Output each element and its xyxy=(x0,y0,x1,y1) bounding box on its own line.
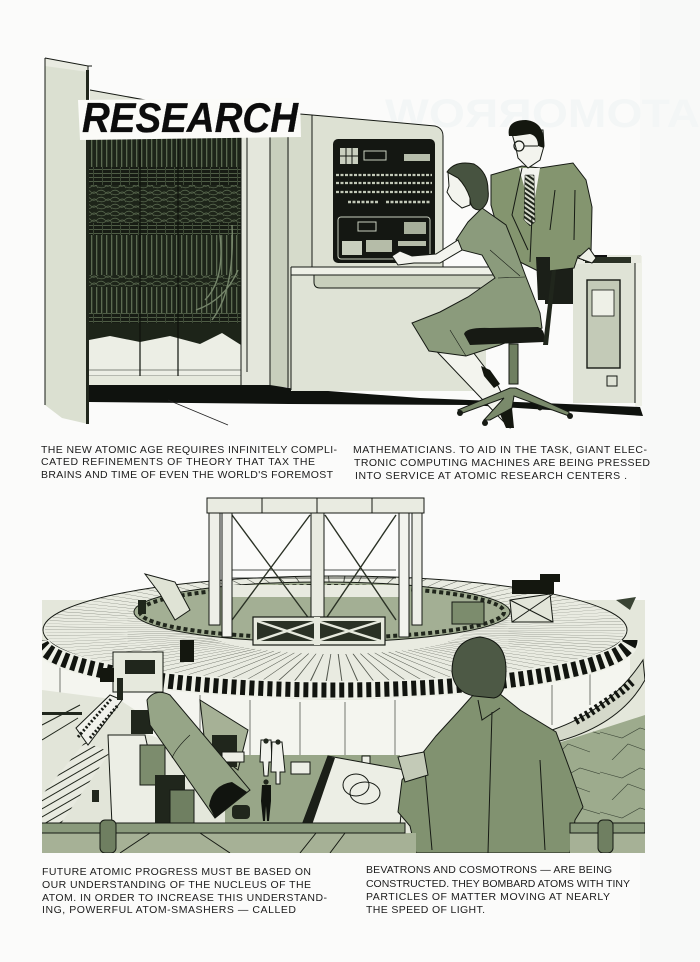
caption: computing machines: TRONIC COMPUTING MACHINES ARE BEING PRESSED xyxy=(354,457,650,469)
left platform xyxy=(42,652,165,825)
tilted table in foreground xyxy=(302,756,405,825)
equipment around tube xyxy=(131,700,248,825)
accelerator tube xyxy=(147,692,250,819)
caption: atom smashers: PARTICLES OF MATTER MOVING AT NEARLY xyxy=(366,891,610,903)
open cabinet with wiring xyxy=(89,137,267,386)
caption: computing machines: THE NEW ATOMIC AGE REQUIRES INFINITELY COMPLI- xyxy=(41,444,338,456)
outer ring surface xyxy=(43,576,627,684)
woman's arm xyxy=(392,240,462,265)
outer stepped ramp at right xyxy=(552,660,645,742)
woman's shoes xyxy=(481,366,514,428)
man in suit xyxy=(491,120,596,304)
ramp steps xyxy=(574,682,632,722)
title label: RESEARCH: RESEARCH xyxy=(82,94,300,141)
caption: computing machines xyxy=(41,444,650,482)
left wall xyxy=(45,58,240,424)
caption: atom smashers: ING, POWERFUL ATOM-SMASHERS — CALLED xyxy=(42,904,296,916)
control block xyxy=(113,652,163,692)
caption: atom smashers: CONSTRUCTED. THEY BOMBARD ATOMS WITH TINY xyxy=(366,878,630,890)
clipboard xyxy=(398,752,428,782)
console cabinet xyxy=(289,114,496,391)
magnet slots dark row xyxy=(42,640,638,698)
faint show-through from the reverse page xyxy=(385,0,700,962)
head of man xyxy=(452,637,506,698)
caption: atom smashers: FUTURE ATOMIC PROGRESS MUST BE BASED ON xyxy=(42,866,311,878)
floor marks xyxy=(168,400,228,425)
stairs xyxy=(76,695,122,745)
caption: computing machines: CATED REFINEMENTS OF THEORY THAT TAX THE xyxy=(41,456,315,468)
wall seams xyxy=(60,668,590,755)
floor shadow band xyxy=(89,385,643,416)
standing worker on platform xyxy=(117,678,123,700)
woman at console xyxy=(392,163,573,428)
tower frame xyxy=(207,498,424,638)
back floor xyxy=(42,600,645,853)
caption: computing machines: MATHEMATICIANS. TO AID IN THE TASK, GIANT ELEC- xyxy=(353,444,648,456)
stool and base xyxy=(457,270,573,426)
control panel xyxy=(333,139,435,263)
illustration: atom smasher xyxy=(40,498,645,853)
man's head xyxy=(509,120,544,168)
faint show-through from the reverse page: ATOMORROW xyxy=(385,92,700,136)
woman's legs xyxy=(423,337,512,428)
caption: atom smashers: ATOM. IN ORDER TO INCREASE THIS UNDERSTAND- xyxy=(42,892,328,904)
caption: computing machines: BRAINS AND TIME OF EVEN THE WORLD'S FOREMOST xyxy=(41,469,334,481)
man in green coat xyxy=(398,637,583,853)
illustration: computer room xyxy=(45,58,643,428)
woman's head xyxy=(447,163,488,210)
cabinet pillar xyxy=(241,116,289,390)
woman's stool back xyxy=(536,257,550,300)
floor right xyxy=(560,715,645,822)
magnet slots front band xyxy=(42,640,639,699)
caption: atom smashers: OUR UNDERSTANDING OF THE NUCLEUS OF THE xyxy=(42,879,311,891)
side unit xyxy=(560,255,642,406)
caption: atom smashers: THE SPEED OF LIGHT. xyxy=(366,904,485,916)
workers on the floor xyxy=(260,738,370,821)
floor centre xyxy=(225,755,400,825)
caption: atom smashers xyxy=(42,864,630,916)
rear equipment on ring xyxy=(138,574,636,662)
caption: computing machines: INTO SERVICE AT ATOMIC RESEARCH CENTERS . xyxy=(355,470,627,482)
caption: atom smashers: BEVATRONS AND COSMOTRONS — ARE BEING xyxy=(366,864,612,876)
central crossbraced panel xyxy=(253,617,385,645)
foreground railing xyxy=(40,820,645,853)
woman's dress xyxy=(412,208,542,356)
white drum wall xyxy=(42,657,630,756)
